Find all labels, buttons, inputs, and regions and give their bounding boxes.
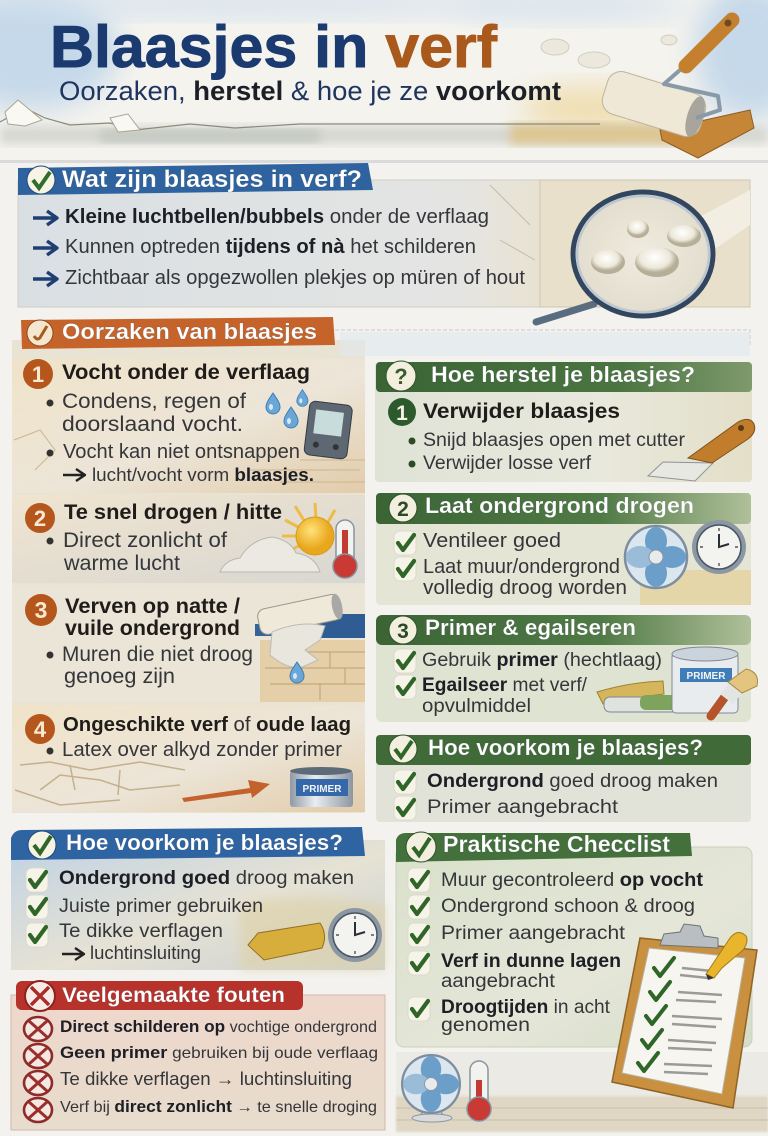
panel: hoe herstel je blaasjes	[375, 361, 755, 482]
heading band: Hoe voorkom je blaasjes?	[66, 830, 343, 855]
text: definition list: Zichtbaar als opgezwollen plekjes op müren of hout	[65, 267, 525, 289]
heading band	[396, 831, 692, 862]
heading band: Praktische Checclist	[443, 831, 670, 857]
card: cause 3 wet surface	[12, 585, 365, 702]
panel: primer en egailseren	[376, 615, 758, 722]
panel: primer en egailseren: Egailseer met verf/	[422, 675, 588, 696]
heading band: oorzaken: Oorzaken van blaasjes	[62, 319, 317, 344]
heading band: wat zijn blaasjes: Wat zijn blaasjes in verf?	[62, 166, 362, 193]
card: cause 1 moisture: Vocht kan niet ontsnappen	[63, 441, 300, 463]
heading band	[16, 981, 303, 1011]
card: cause 3 wet surface: genoeg zijn	[64, 665, 175, 688]
heading band	[376, 735, 751, 765]
card: cause 1 moisture: Vocht onder de verflaag	[62, 361, 310, 384]
panel: laat ondergrond drogen	[376, 493, 751, 605]
icon: filler roll and clock	[248, 908, 382, 962]
header: painted wall background	[0, 0, 768, 163]
card: cause 4 wrong paint	[12, 705, 365, 812]
panel: hoe voorkom je blaasjes (green): Primer aangebracht	[427, 797, 619, 818]
panel: veelgemaakte fouten: Verf bij direct zonlicht → te snelle droging	[60, 1097, 377, 1116]
card: cause 1 moisture	[12, 359, 365, 493]
heading band	[376, 615, 751, 645]
panel: praktische checklist: Primer aangebracht	[441, 923, 626, 944]
heading band: Hoe herstel je blaasjes?	[431, 362, 695, 387]
panel: praktische checklist: Verf in dunne lagen	[441, 951, 621, 972]
card: cause 1 moisture: doorslaand vocht.	[62, 413, 243, 436]
panel: hoe voorkom je blaasjes (blue): Juiste primer gebruiken	[59, 896, 263, 917]
icon: scraper	[648, 419, 755, 481]
panel: praktische checklist: Ondergrond schoon & droog	[441, 896, 695, 917]
panel: veelgemaakte fouten: Direct schilderen op vochtige ondergrond	[60, 1017, 377, 1036]
heading band: 3	[397, 620, 409, 643]
card: cause 4 wrong paint: Ongeschikte verf of oude laag	[63, 714, 351, 736]
heading band: 2	[397, 498, 409, 521]
heading band: Laat ondergrond drogen	[425, 493, 694, 518]
heading band: ?	[394, 364, 408, 389]
panel: praktische checklist: Muur gecontroleerd op vocht	[441, 870, 704, 891]
panel: praktische checklist: Droogtijden in acht	[441, 997, 611, 1018]
icon: sun, cloud and thermometer	[220, 503, 357, 578]
icon: paint roller on wooden block	[599, 20, 754, 158]
text: definition list: Kunnen optreden tijdens of nà het schilderen	[65, 236, 476, 258]
panel: praktische checklist: aangebracht	[441, 971, 556, 992]
panel: hoe herstel je blaasjes: Verwijder blaasjes	[423, 400, 620, 423]
panel: laat ondergrond drogen: Ventileer goed	[423, 530, 561, 552]
panel: laat ondergrond drogen: volledig droog worden	[423, 577, 627, 599]
icon: primer tin, filler rolls and brush: PRIMER	[687, 671, 726, 682]
title: Blaasjes in verf	[50, 14, 497, 80]
icon: thermometer	[467, 1061, 491, 1121]
panel: hoe herstel je blaasjes: Snijd blaasjes open met cutter	[423, 430, 686, 451]
icon: arrow to primer tin: PRIMER	[303, 784, 342, 795]
card: cause 3 wet surface: vuile ondergrond	[65, 617, 240, 640]
panel: praktische checklist	[396, 831, 752, 1047]
panel: hoe herstel je blaasjes: Verwijder losse verf	[423, 453, 592, 474]
icon: pencil	[706, 932, 747, 980]
subtitle: Oorzaken, herstel & hoe je ze voorkomt	[59, 76, 561, 106]
card: cause 1 moisture: Condens, regen of	[62, 390, 246, 413]
card: cause 3 wet surface: 3	[35, 597, 47, 623]
panel: praktische checklist: genomen	[441, 1015, 530, 1036]
card: cause 1 moisture: lucht/vocht vorm blaasjes.	[92, 465, 314, 485]
panel: hoe voorkom je blaasjes (blue): luchtinsluiting	[90, 943, 201, 963]
icon: clipboard with checklist	[612, 924, 757, 1108]
floor background	[396, 1052, 768, 1132]
card: cause 2 heat: Te snel drogen / hitte	[64, 501, 282, 524]
heading band: wat zijn blaasjes	[18, 163, 373, 195]
panel: wat zijn blaasjes	[18, 180, 750, 322]
panel: hoe voorkom je blaasjes (blue)	[11, 827, 385, 970]
heading band	[376, 361, 752, 392]
card: cause 4 wrong paint: Latex over alkyd zonder primer	[62, 739, 342, 761]
heading band	[376, 493, 751, 524]
panel: hoe voorkom je blaasjes (blue): Te dikke verflagen	[59, 921, 223, 942]
card: cause 2 heat: 2	[34, 506, 46, 531]
icon: fan on stand	[402, 1055, 460, 1122]
panel: hoe voorkom je blaasjes (green)	[376, 735, 751, 822]
card: cause 1 moisture: 1	[32, 362, 44, 387]
heading band: Veelgemaakte fouten	[62, 984, 285, 1007]
panel: veelgemaakte fouten	[11, 981, 385, 1130]
panel: primer en egailseren: Gebruik primer (hechtlaag)	[422, 650, 662, 671]
icon: primer tin, filler rolls and brush	[597, 647, 758, 716]
heading band: Primer & egailseren	[425, 615, 636, 640]
card: cause 2 heat: Direct zonlicht of	[63, 529, 227, 552]
panel: veelgemaakte fouten: Te dikke verflagen → luchtinsluiting	[60, 1069, 352, 1089]
panel: hoe herstel je blaasjes: 1	[396, 402, 408, 425]
card: cause 3 wet surface: Muren die niet droog	[62, 643, 253, 666]
panel: oorzaken van blaasjes	[12, 317, 750, 813]
text: definition list: Kleine luchtbellen/bubbels onder de verflaag	[65, 206, 489, 228]
panel: laat ondergrond drogen: Laat muur/ondergrond	[423, 556, 620, 578]
card: cause 2 heat	[12, 495, 365, 583]
heading band: Hoe voorkom je blaasjes?	[428, 735, 703, 760]
icon: water drops and moisture meter	[266, 390, 353, 459]
icon: arrow to primer tin	[182, 767, 353, 807]
panel: hoe voorkom je blaasjes (green): Ondergrond goed droog maken	[427, 771, 718, 792]
card: cause 3 wet surface: Verven op natte /	[65, 595, 240, 618]
card: cause 2 heat: warme lucht	[63, 552, 180, 575]
icon: roller over blue trim with dripping paint	[255, 593, 365, 683]
panel: primer en egailseren: opvulmiddel	[422, 696, 531, 717]
text: definition list	[33, 206, 525, 289]
heading band: oorzaken	[21, 317, 335, 349]
card: cause 4 wrong paint: 4	[34, 717, 47, 742]
heading band	[11, 827, 365, 860]
icon: magnifying glass with bubbles	[536, 192, 713, 322]
panel: hoe voorkom je blaasjes (blue): Ondergrond goed droog maken	[59, 868, 354, 889]
icon: fan and clock	[625, 520, 746, 588]
panel: veelgemaakte fouten: Geen primer gebruiken bij oude verflaag	[60, 1043, 378, 1062]
